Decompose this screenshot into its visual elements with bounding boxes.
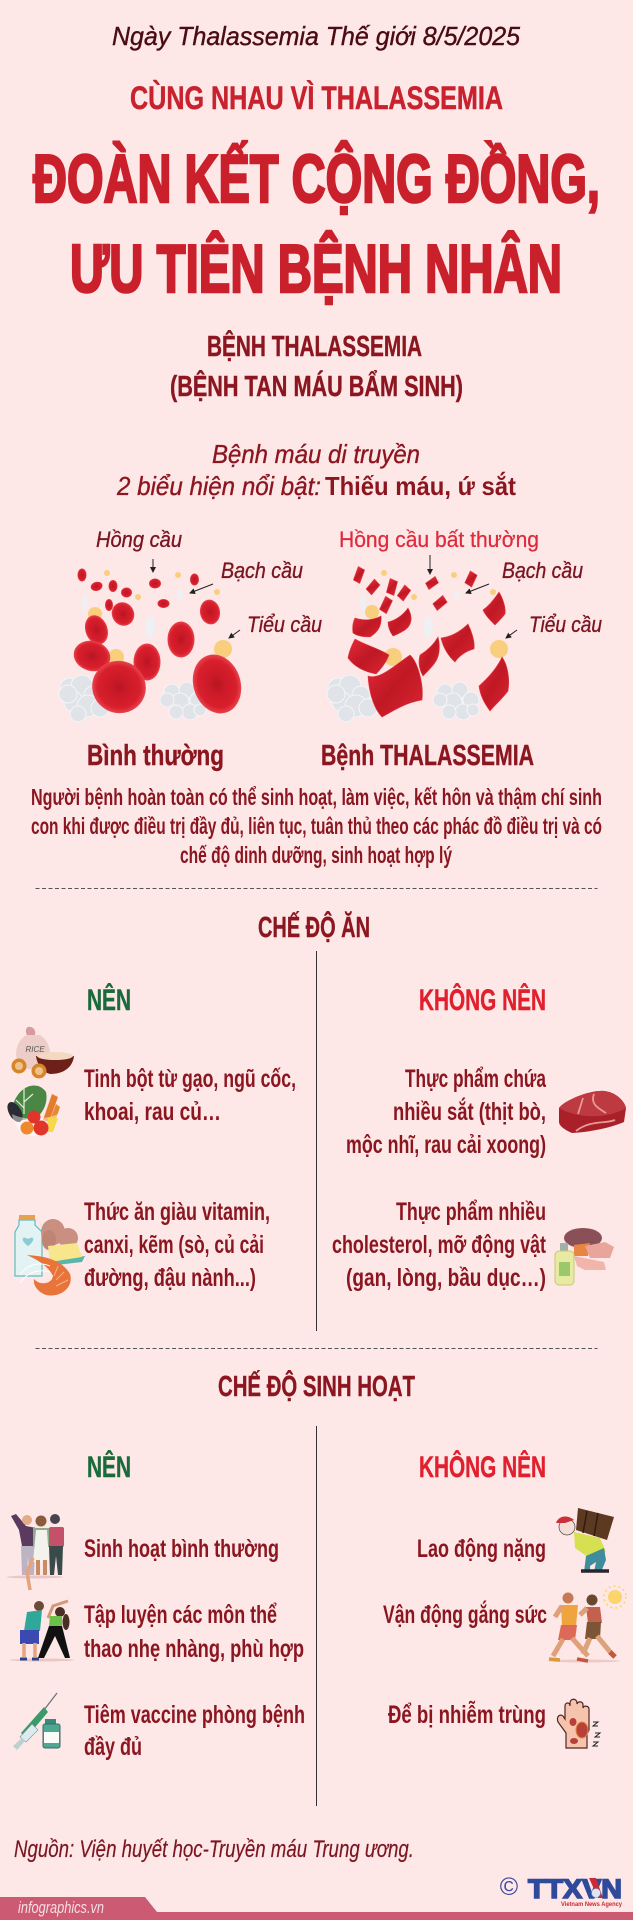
label: platelet: Tiểu cầu (247, 612, 322, 637)
text: avoid cholesterol: Thực phẩm nhiều (396, 1198, 546, 1226)
text: normal activity: Sinh hoạt bình thường (84, 1535, 279, 1563)
label: abnormal red cell: Hồng cầu bất thường (339, 527, 539, 552)
logo: copyright: © (500, 1873, 519, 1901)
icon: vaccine (13, 1693, 60, 1750)
disease heading: BỆNH THALASSEMIA (207, 329, 422, 363)
text: light exercise: Tập luyện các môn thể (84, 1601, 277, 1629)
arrows (430, 555, 517, 638)
text: avoid iron foods (346, 1065, 547, 1159)
diet: should not heading: KHÔNG NÊN (419, 983, 546, 1017)
date line: Ngày Thalassemia Thế giới 8/5/2025 (112, 21, 521, 51)
text: should eat vitamin: Thức ăn giàu vitamin, (84, 1198, 270, 1226)
disease heading: (BỆNH TAN MÁU BẨM SINH) (170, 369, 463, 403)
white blood cells (327, 675, 479, 722)
icon: runners in sun (548, 1586, 626, 1662)
icon: rice and grains (12, 1027, 74, 1078)
paragraph (31, 784, 602, 868)
small white cells (360, 591, 460, 638)
platelets (365, 570, 508, 666)
main title (33, 140, 600, 307)
text: avoid cholesterol: cholesterol, mỡ động vật (332, 1231, 546, 1259)
heading: lifestyle: CHẾ ĐỘ SINH HOẠT (218, 1369, 415, 1403)
text: vaccine: đầy đủ (84, 1733, 142, 1761)
text: avoid cholesterol: (gan, lòng, bầu dục…) (346, 1264, 546, 1292)
subtitle: CÙNG NHAU VÌ THALASSEMIA (130, 80, 503, 116)
text: vaccine: Tiêm vaccine phòng bệnh (84, 1701, 305, 1729)
label: white cell: Bạch cầu (221, 558, 303, 583)
label: red cell: Hồng cầu (96, 527, 182, 552)
caption: thalassemia: Bệnh THALASSEMIA (321, 740, 534, 772)
platelets (88, 570, 232, 665)
disease summary (116, 439, 516, 501)
paragraph: chế độ dinh dưỡng, sinh hoạt hợp lý (180, 842, 452, 868)
icon: beef (559, 1091, 626, 1133)
icon: group of people (7, 1514, 64, 1578)
icon: milk, potato, butter, shrimp (15, 1215, 85, 1295)
disease summary: 2 biểu hiện nổi bật: (116, 471, 321, 501)
lifestyle: should not heading: KHÔNG NÊN (419, 1450, 546, 1484)
abnormal red cells (348, 567, 509, 717)
text: avoid iron foods: Thực phẩm chứa (405, 1065, 547, 1093)
text: light exercise: thao nhẹ nhàng, phù hợp (84, 1635, 304, 1663)
disease summary: Bệnh máu di truyền (212, 439, 420, 469)
disease summary: Thiếu máu, ứ sắt (325, 471, 516, 501)
text: over exertion: Vận động gắng sức (383, 1599, 547, 1629)
text: should eat starch: khoai, rau củ… (84, 1098, 221, 1126)
logo: TTXVN: TTXVN (528, 1874, 622, 1904)
caption: normal: Bình thường (87, 740, 224, 772)
arrows (153, 559, 240, 638)
icon: fatty foods and oil (555, 1228, 614, 1285)
source note: Nguồn: Viện huyết học-Truyền máu Trung ương. (14, 1836, 414, 1863)
text: vaccine (84, 1701, 305, 1761)
text: should eat vitamin: canxi, kẽm (sò, củ cải (84, 1231, 264, 1259)
footer site: infographics.vn (18, 1898, 104, 1917)
white blood cells (59, 675, 206, 722)
logo: TTXVN: Vietnam News Agency (561, 1902, 623, 1908)
text: avoid cholesterol (332, 1198, 546, 1292)
text: avoid iron foods: nhiều sắt (thịt bò, (393, 1096, 546, 1126)
icon: heavy labour (556, 1508, 614, 1572)
label: platelet: Tiểu cầu (529, 612, 602, 637)
text: light exercise (84, 1601, 304, 1663)
text: infection: Để bị nhiễm trùng (388, 1699, 546, 1729)
disease heading (170, 329, 463, 403)
text: should eat starch: Tinh bột từ gạo, ngũ cốc, (84, 1065, 296, 1093)
diagram: normal blood cells (59, 527, 322, 722)
lifestyle: should heading: NÊN (87, 1450, 131, 1484)
icon: rice and grains: RICE (25, 1045, 45, 1054)
text: should eat starch (84, 1065, 296, 1126)
label: white cell: Bạch cầu (502, 558, 583, 583)
icon: infected hand (557, 1699, 600, 1748)
heading: diet: CHẾ ĐỘ ĂN (258, 910, 370, 944)
text: avoid iron foods: mộc nhĩ, rau cải xoong) (346, 1131, 546, 1159)
small white cells (82, 589, 183, 638)
icon: exercise (10, 1558, 74, 1662)
text: should eat vitamin (84, 1198, 270, 1292)
text: should eat vitamin: đường, đậu nành...) (84, 1264, 256, 1292)
red blood cells (70, 568, 249, 722)
footer band (0, 1897, 633, 1920)
diagram: thalassemia blood cells (327, 527, 602, 722)
diet: should heading: NÊN (87, 983, 131, 1017)
icon: vegetables (4, 1085, 60, 1136)
text: heavy labour: Lao động nặng (417, 1535, 546, 1563)
